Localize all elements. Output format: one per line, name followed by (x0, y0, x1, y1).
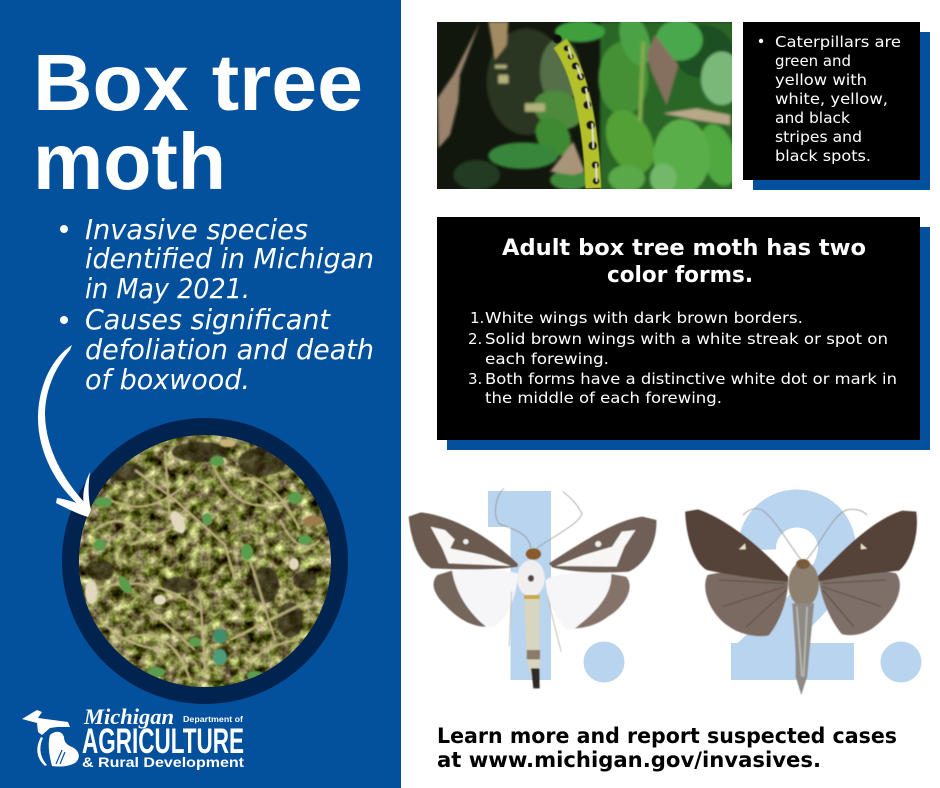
panel: caterpillar description: white, yellow, (775, 90, 888, 108)
footer call to action: at www.michigan.gov/invasives. (437, 748, 821, 772)
numbered list: Both forms have a distinctive white dot or mark in (485, 370, 897, 388)
numbered list: 1. (470, 309, 484, 327)
dead leaves (437, 22, 480, 148)
panel: caterpillar description (743, 22, 930, 190)
panel: caterpillar description: green and (775, 52, 851, 70)
numeral 1 (488, 491, 624, 682)
title (33, 38, 363, 206)
logo: Michigan Department of Agriculture: Michigan (83, 704, 174, 729)
numbered list: 3. (468, 370, 482, 388)
panel: caterpillar description: and black (775, 109, 850, 127)
heading: color forms. (607, 263, 753, 288)
logo: Michigan Department of Agriculture: & Rural Development (82, 754, 244, 770)
numbered list: White wings with dark brown borders. (485, 309, 803, 327)
logo: Michigan Department of Agriculture: Department of (183, 715, 243, 724)
panel: caterpillar description: black spots. (775, 147, 871, 165)
bullet list: key facts: Invasive species (85, 213, 308, 246)
bullet list: key facts: defoliation and death (85, 333, 374, 366)
footer call to action: Learn more and report suspected cases (437, 724, 897, 748)
numeral 2 (731, 509, 922, 682)
numbered list: the middle of each forewing. (485, 389, 722, 407)
arrow (38, 345, 91, 517)
moth 1: white form (409, 488, 656, 688)
numbered list: each forewing. (485, 350, 609, 368)
panel: caterpillar description: stripes and (775, 128, 862, 146)
bullet list: key facts (60, 213, 374, 396)
heading: Adult box tree moth has two (502, 236, 866, 261)
icon: Michigan map (22, 710, 79, 767)
numbered list: Solid brown wings with a white streak or spot on (485, 330, 888, 348)
logo: Michigan Department of Agriculture (22, 704, 244, 770)
photo: caterpillar on boxwood (437, 22, 732, 189)
bullet list: key facts: identified in Michigan (85, 242, 374, 275)
bullet list: key facts: in May 2021. (85, 272, 250, 305)
bullet list: key facts: of boxwood. (85, 363, 250, 396)
footer call to action (437, 724, 897, 772)
caterpillar (553, 35, 599, 188)
logo: Michigan Department of Agriculture: AGRICULTURE (82, 722, 244, 761)
moth 2: brown form (685, 509, 917, 695)
photo: defoliated boxwood in circle (62, 418, 348, 704)
panel: left blue sidebar (0, 0, 401, 788)
panel: caterpillar description: Caterpillars are (775, 33, 901, 51)
title: Box tree (33, 38, 363, 127)
heading (502, 236, 866, 288)
numbered list (468, 309, 897, 407)
bullet list: key facts: Causes significant (85, 303, 331, 336)
numbered list: 2. (468, 330, 482, 348)
panel: adult moth color forms (437, 217, 930, 450)
panel: caterpillar description: yellow with (775, 71, 867, 89)
title: moth (33, 117, 226, 206)
